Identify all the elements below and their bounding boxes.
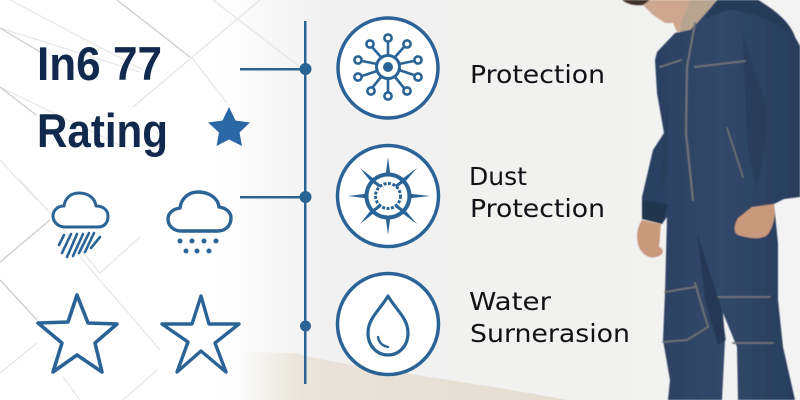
floor [240,352,567,400]
icon: outline star left [38,295,117,372]
labels: Dust [469,162,527,191]
icon: snow cloud [168,192,231,254]
labels: Protection [470,60,605,89]
title: Rating [37,104,168,157]
labels: Surnerasion [470,319,630,348]
suit shading [743,33,767,190]
timeline connector [240,21,312,384]
zippers and seams [660,23,773,343]
icon: water drop circle [338,274,438,374]
icon: solid star [208,107,250,146]
title: In6 77 [37,37,162,90]
suit [642,0,800,400]
title [37,37,168,157]
icon: protection circle [338,18,438,118]
hand right [735,204,775,238]
icon: dust protection circle [338,146,438,246]
icon: outline star right [162,296,239,372]
head [640,0,717,32]
labels: Water [469,287,552,316]
labels: Protection [470,194,605,223]
hand left [637,220,663,257]
photo: man in navy coverall [622,0,800,400]
labels [469,60,630,348]
icon: rain cloud [53,193,108,257]
